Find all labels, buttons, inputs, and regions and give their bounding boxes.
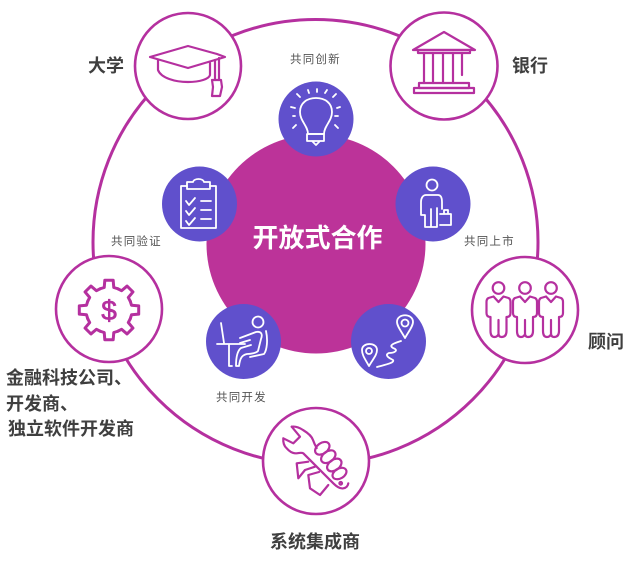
icon: checklist bbox=[181, 179, 216, 228]
central circle bbox=[206, 134, 426, 354]
icon: hand holding wrench bbox=[283, 427, 348, 495]
node: co-development bbox=[206, 304, 281, 379]
icon: bank building bbox=[413, 32, 475, 93]
label: fintech and developers bbox=[6, 367, 134, 439]
label: fintech and developers: 独立软件开发商 bbox=[8, 418, 134, 439]
icon: person at desk bbox=[217, 316, 267, 366]
label: fintech and developers: 开发商、 bbox=[6, 393, 78, 414]
icon: graduation cap bbox=[150, 46, 225, 96]
label: co-validation: 共同验证 bbox=[111, 234, 162, 248]
node: co-roadmap bbox=[351, 304, 426, 379]
label: advisor: 顾问 bbox=[588, 332, 624, 352]
icon: dollar gear: $ bbox=[101, 295, 117, 326]
label: co-development: 共同开发 bbox=[216, 390, 267, 404]
icon: map route with pins bbox=[362, 315, 413, 367]
icon: three consultants bbox=[486, 282, 563, 337]
node: system integrator bbox=[263, 408, 369, 514]
node: advisor bbox=[472, 257, 578, 363]
label: bank: 银行 bbox=[512, 56, 548, 76]
label: fintech and developers: 金融科技公司、 bbox=[6, 367, 132, 388]
node: co-innovation bbox=[278, 82, 354, 156]
outer ring bbox=[93, 20, 538, 464]
label: co-innovation: 共同创新 bbox=[290, 52, 341, 66]
node: co-validation bbox=[162, 166, 237, 242]
central title: 开放式合作 bbox=[252, 223, 383, 253]
icon: person with briefcase bbox=[421, 180, 451, 227]
label: co-listing: 共同上市 bbox=[464, 234, 515, 248]
node: co-listing bbox=[396, 166, 470, 242]
node: university bbox=[135, 13, 241, 119]
node: bank bbox=[390, 12, 498, 120]
label: system integrator: 系统集成商 bbox=[270, 531, 360, 552]
node: fintech bbox=[56, 256, 162, 362]
icon: light bulb bbox=[291, 89, 340, 145]
label: university: 大学 bbox=[88, 55, 124, 76]
